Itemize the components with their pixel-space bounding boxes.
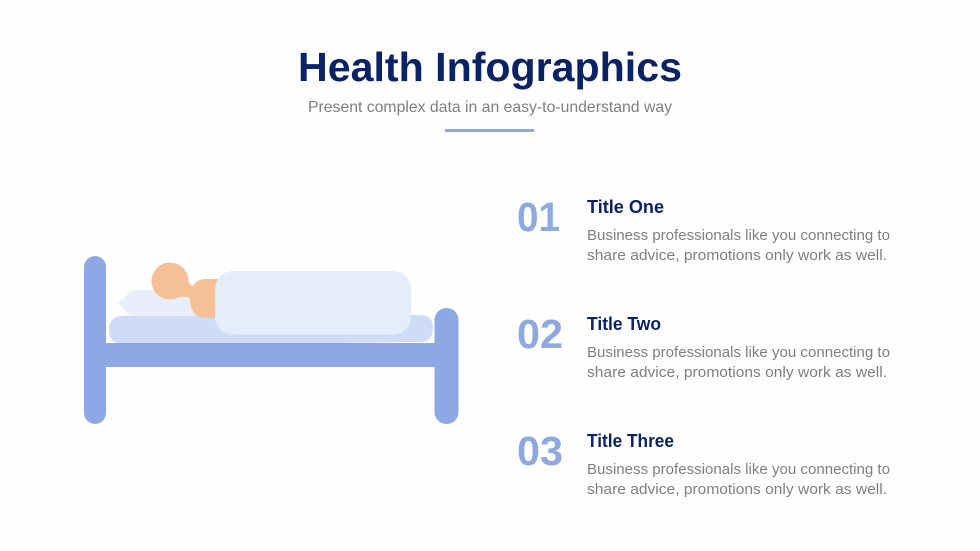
subtitle: Present complex data in an easy-to-understand way (308, 99, 672, 116)
item 02 (517, 311, 890, 381)
body: Business professionals like you connecting to (587, 461, 890, 478)
body: Business professionals like you connecting to (587, 344, 890, 361)
illustration: person lying in bed (84, 256, 458, 424)
item 03 (517, 428, 890, 498)
title underline (445, 129, 534, 132)
heading: Title One (587, 197, 664, 217)
bed frame (84, 256, 458, 424)
pillow (118, 290, 200, 316)
blanket (215, 271, 411, 334)
body: share advice, promotions only work as well. (587, 364, 887, 381)
body: share advice, promotions only work as well. (587, 481, 887, 498)
heading: Title Two (587, 314, 661, 334)
title: Health Infographics (298, 44, 682, 90)
body: share advice, promotions only work as well. (587, 247, 887, 264)
heading: Title Three (587, 431, 674, 451)
body: Business professionals like you connecting to (587, 227, 890, 244)
item 01 (517, 194, 890, 264)
number 02: 02 (517, 311, 563, 357)
person: head and shoulder (152, 262, 218, 318)
number 01: 01 (517, 194, 560, 240)
number 03: 03 (517, 428, 563, 474)
header (298, 44, 682, 132)
mattress (109, 315, 433, 344)
